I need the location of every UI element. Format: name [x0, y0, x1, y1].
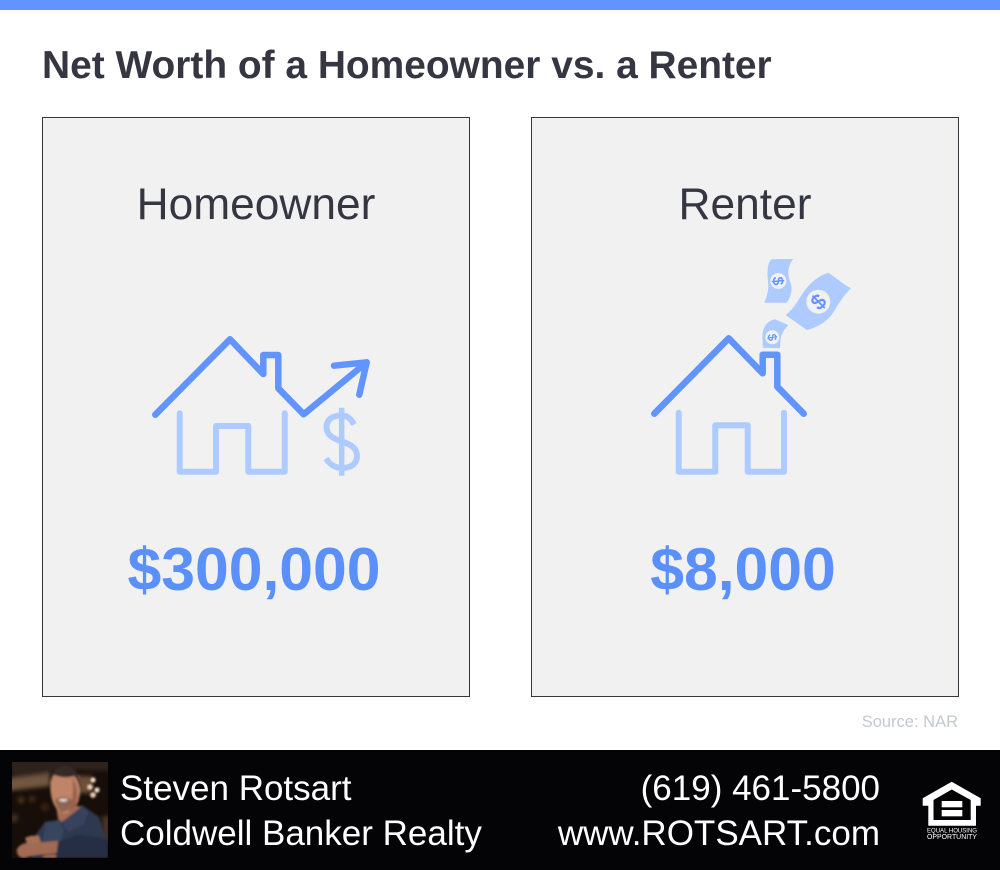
panel: renter — [531, 117, 959, 697]
phone number: (619) 461-5800 — [641, 769, 880, 808]
goatee and smile — [55, 797, 72, 812]
icon: equal housing opportunity logo: OPPORTUNITY — [927, 834, 977, 841]
agent portrait — [12, 762, 108, 858]
shirt — [32, 805, 108, 858]
icon: equal housing opportunity logo — [922, 782, 981, 841]
neck — [56, 806, 81, 822]
face — [50, 774, 80, 814]
homeowner heading: Homeowner — [137, 180, 375, 229]
renter value: $8,000 — [650, 535, 836, 603]
source note: Source: NAR — [862, 713, 958, 731]
panel: homeowner — [42, 117, 470, 697]
sleeve — [55, 840, 108, 858]
dollar glyph: lowest bill: $ — [765, 333, 780, 342]
homeowner value: $300,000 — [127, 535, 381, 603]
hair — [50, 766, 81, 791]
top accent bar — [0, 0, 1000, 10]
agent name: Steven Rotsart — [120, 769, 352, 808]
renter heading: Renter — [679, 180, 811, 229]
website: www.ROTSART.com — [558, 814, 880, 853]
brokerage: Coldwell Banker Realty — [120, 814, 482, 853]
arms — [25, 836, 41, 846]
dollar glyph: large bill: $ — [807, 290, 831, 315]
title: Net Worth of a Homeowner vs. a Renter — [42, 44, 772, 87]
footer bar — [0, 750, 1000, 870]
icon: equal housing opportunity logo: EQUAL HOUSING — [927, 828, 977, 834]
dollar glyph: upper bill: $ — [769, 276, 786, 287]
